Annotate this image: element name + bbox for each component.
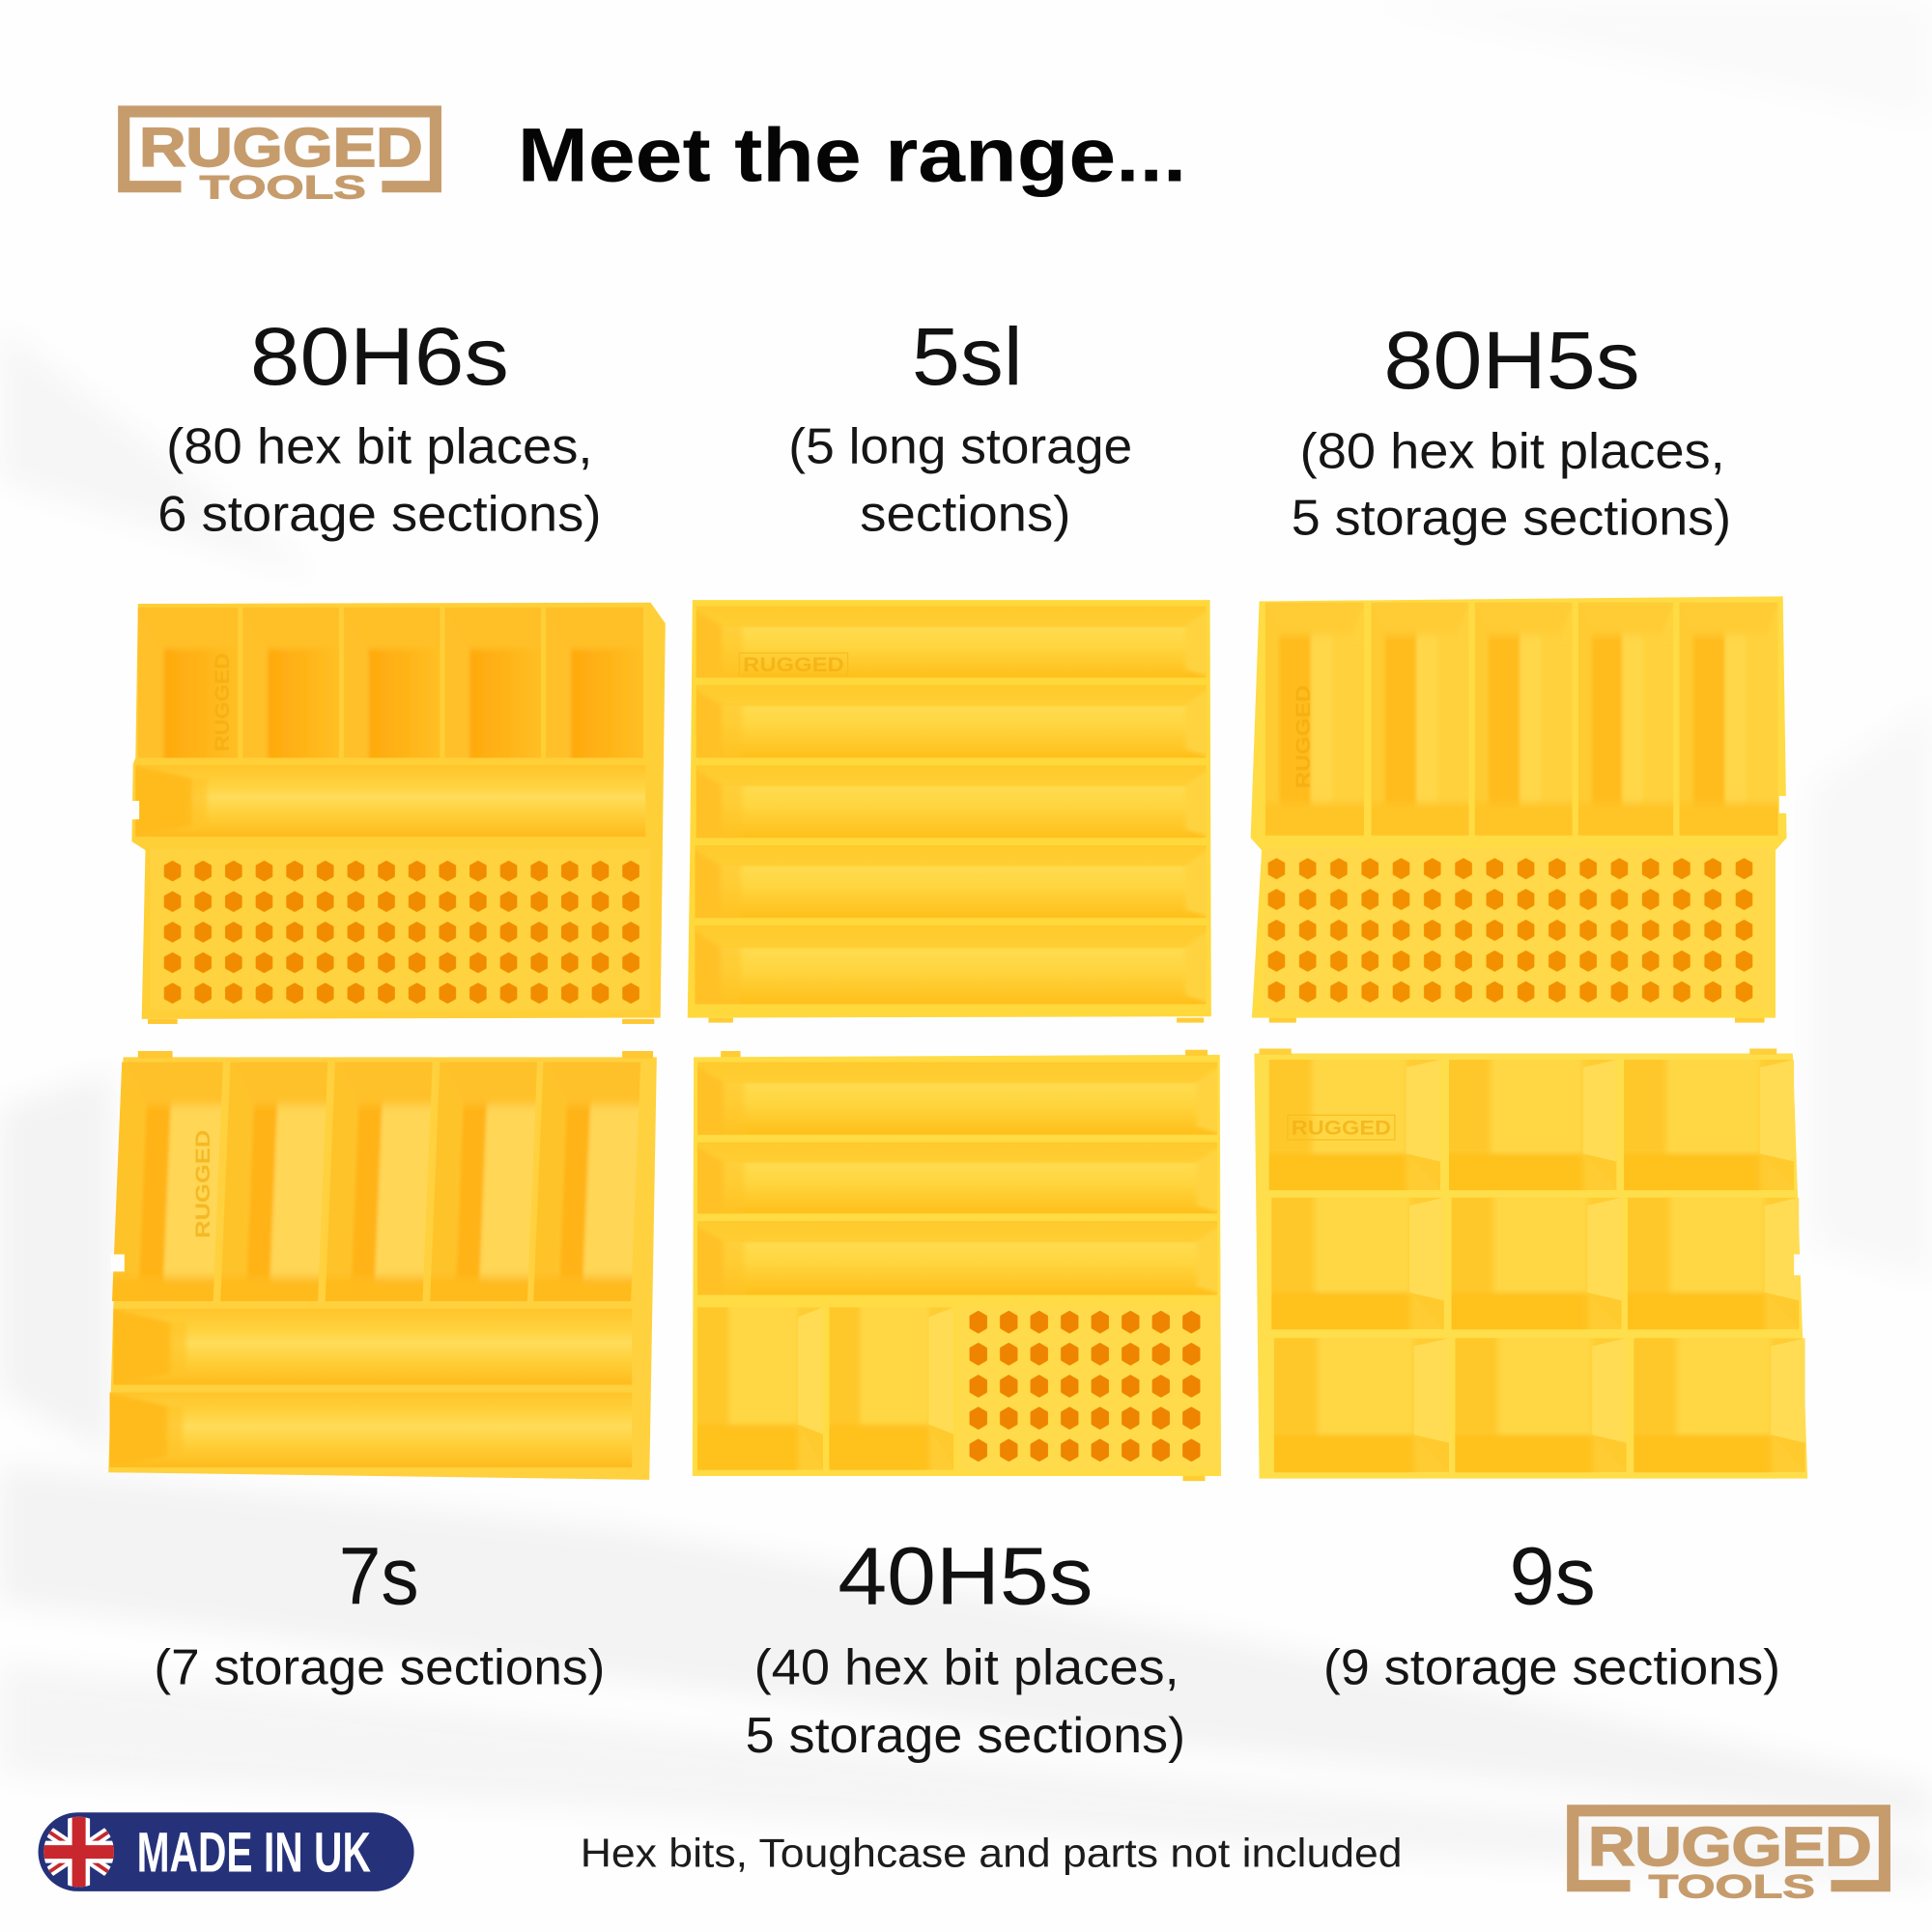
tray: 5sl xyxy=(685,600,1216,1023)
notch xyxy=(130,801,139,819)
feet xyxy=(721,1050,1208,1481)
product label: 7s: 7s xyxy=(339,1531,419,1622)
hex bit panel xyxy=(1261,848,1772,1010)
product label: 80H5s xyxy=(1292,315,1731,547)
product label: 7s: (7 storage sections) xyxy=(154,1640,605,1696)
tray body xyxy=(1254,1054,1807,1479)
notch xyxy=(1779,796,1788,813)
tray body xyxy=(1251,596,1786,1018)
logo: Rugged Tools: TOOLS xyxy=(200,169,366,206)
logo: Rugged Tools footer: TOOLS xyxy=(1649,1868,1815,1905)
embossed logo: RUGGED xyxy=(1292,1116,1391,1140)
product label: 9s: (9 storage sections) xyxy=(1323,1640,1780,1696)
product label: 7s xyxy=(154,1531,605,1696)
product label: 5sl: sections) xyxy=(860,487,1070,543)
notch xyxy=(111,1254,125,1271)
tray: 80H6s xyxy=(126,600,666,1024)
badge: made in UK xyxy=(37,1811,414,1892)
logo: Rugged Tools footer: RUGGED xyxy=(1588,1816,1872,1877)
tray: 7s xyxy=(99,1050,657,1480)
title: Meet the range... xyxy=(518,111,1186,197)
logo: Rugged Tools xyxy=(124,111,436,206)
badge: made in UK: MADE IN UK xyxy=(137,1821,371,1884)
product label: 40H5s: 40H5s xyxy=(838,1531,1093,1622)
tray body xyxy=(693,1055,1221,1476)
tray body xyxy=(688,600,1211,1018)
tray: 9s xyxy=(1254,1048,1808,1479)
storage sections xyxy=(687,1061,1228,1478)
product label: 5sl: (5 long storage xyxy=(788,419,1132,475)
product label: 40H5s: (40 hex bit places, xyxy=(754,1640,1179,1696)
embossed logo: RUGGED xyxy=(210,653,234,752)
logo: Rugged Tools: RUGGED xyxy=(139,117,423,178)
storage sections xyxy=(1261,591,1783,847)
hex bit panel xyxy=(151,849,650,1010)
tray body xyxy=(131,603,666,1019)
embossed logo: RUGGED xyxy=(190,1130,214,1238)
storage sections xyxy=(1261,1053,1805,1479)
product label: 5sl xyxy=(788,311,1132,543)
product label: 80H6s xyxy=(157,311,601,543)
tray: 80H5s xyxy=(1251,591,1788,1023)
product label: 9s: 9s xyxy=(1509,1531,1596,1622)
product label: 40H5s xyxy=(746,1531,1185,1764)
product label: 80H5s: 80H5s xyxy=(1383,315,1640,406)
storage sections xyxy=(126,600,648,838)
storage sections xyxy=(685,605,1216,1006)
feet xyxy=(1260,1048,1776,1055)
feet xyxy=(1269,1018,1765,1023)
tray body xyxy=(108,1057,657,1480)
product label: 5sl: 5sl xyxy=(912,311,1023,402)
icon: union jack flag xyxy=(43,1816,114,1888)
embossed logo: RUGGED xyxy=(1291,685,1315,788)
feet xyxy=(138,1051,653,1059)
logo: Rugged Tools footer xyxy=(1573,1810,1885,1905)
disclaimer: Hex bits, Toughcase and parts not included xyxy=(581,1830,1403,1875)
product label: 80H6s: 6 storage sections) xyxy=(157,487,601,543)
storage sections xyxy=(99,1050,646,1469)
hex bit panel xyxy=(958,1303,1220,1470)
product label: 80H5s: 5 storage sections) xyxy=(1292,491,1731,547)
product label: 9s xyxy=(1323,1531,1780,1696)
tray: 40H5s xyxy=(687,1050,1228,1481)
feet xyxy=(148,1019,654,1024)
product label: 80H5s: (80 hex bit places, xyxy=(1300,424,1725,480)
product label: 80H6s: 80H6s xyxy=(250,311,509,402)
feet xyxy=(708,1018,1204,1023)
notch xyxy=(1794,1254,1808,1275)
embossed logo: RUGGED xyxy=(743,652,844,676)
product label: 40H5s: 5 storage sections) xyxy=(746,1708,1185,1764)
product label: 80H6s: (80 hex bit places, xyxy=(166,419,593,475)
